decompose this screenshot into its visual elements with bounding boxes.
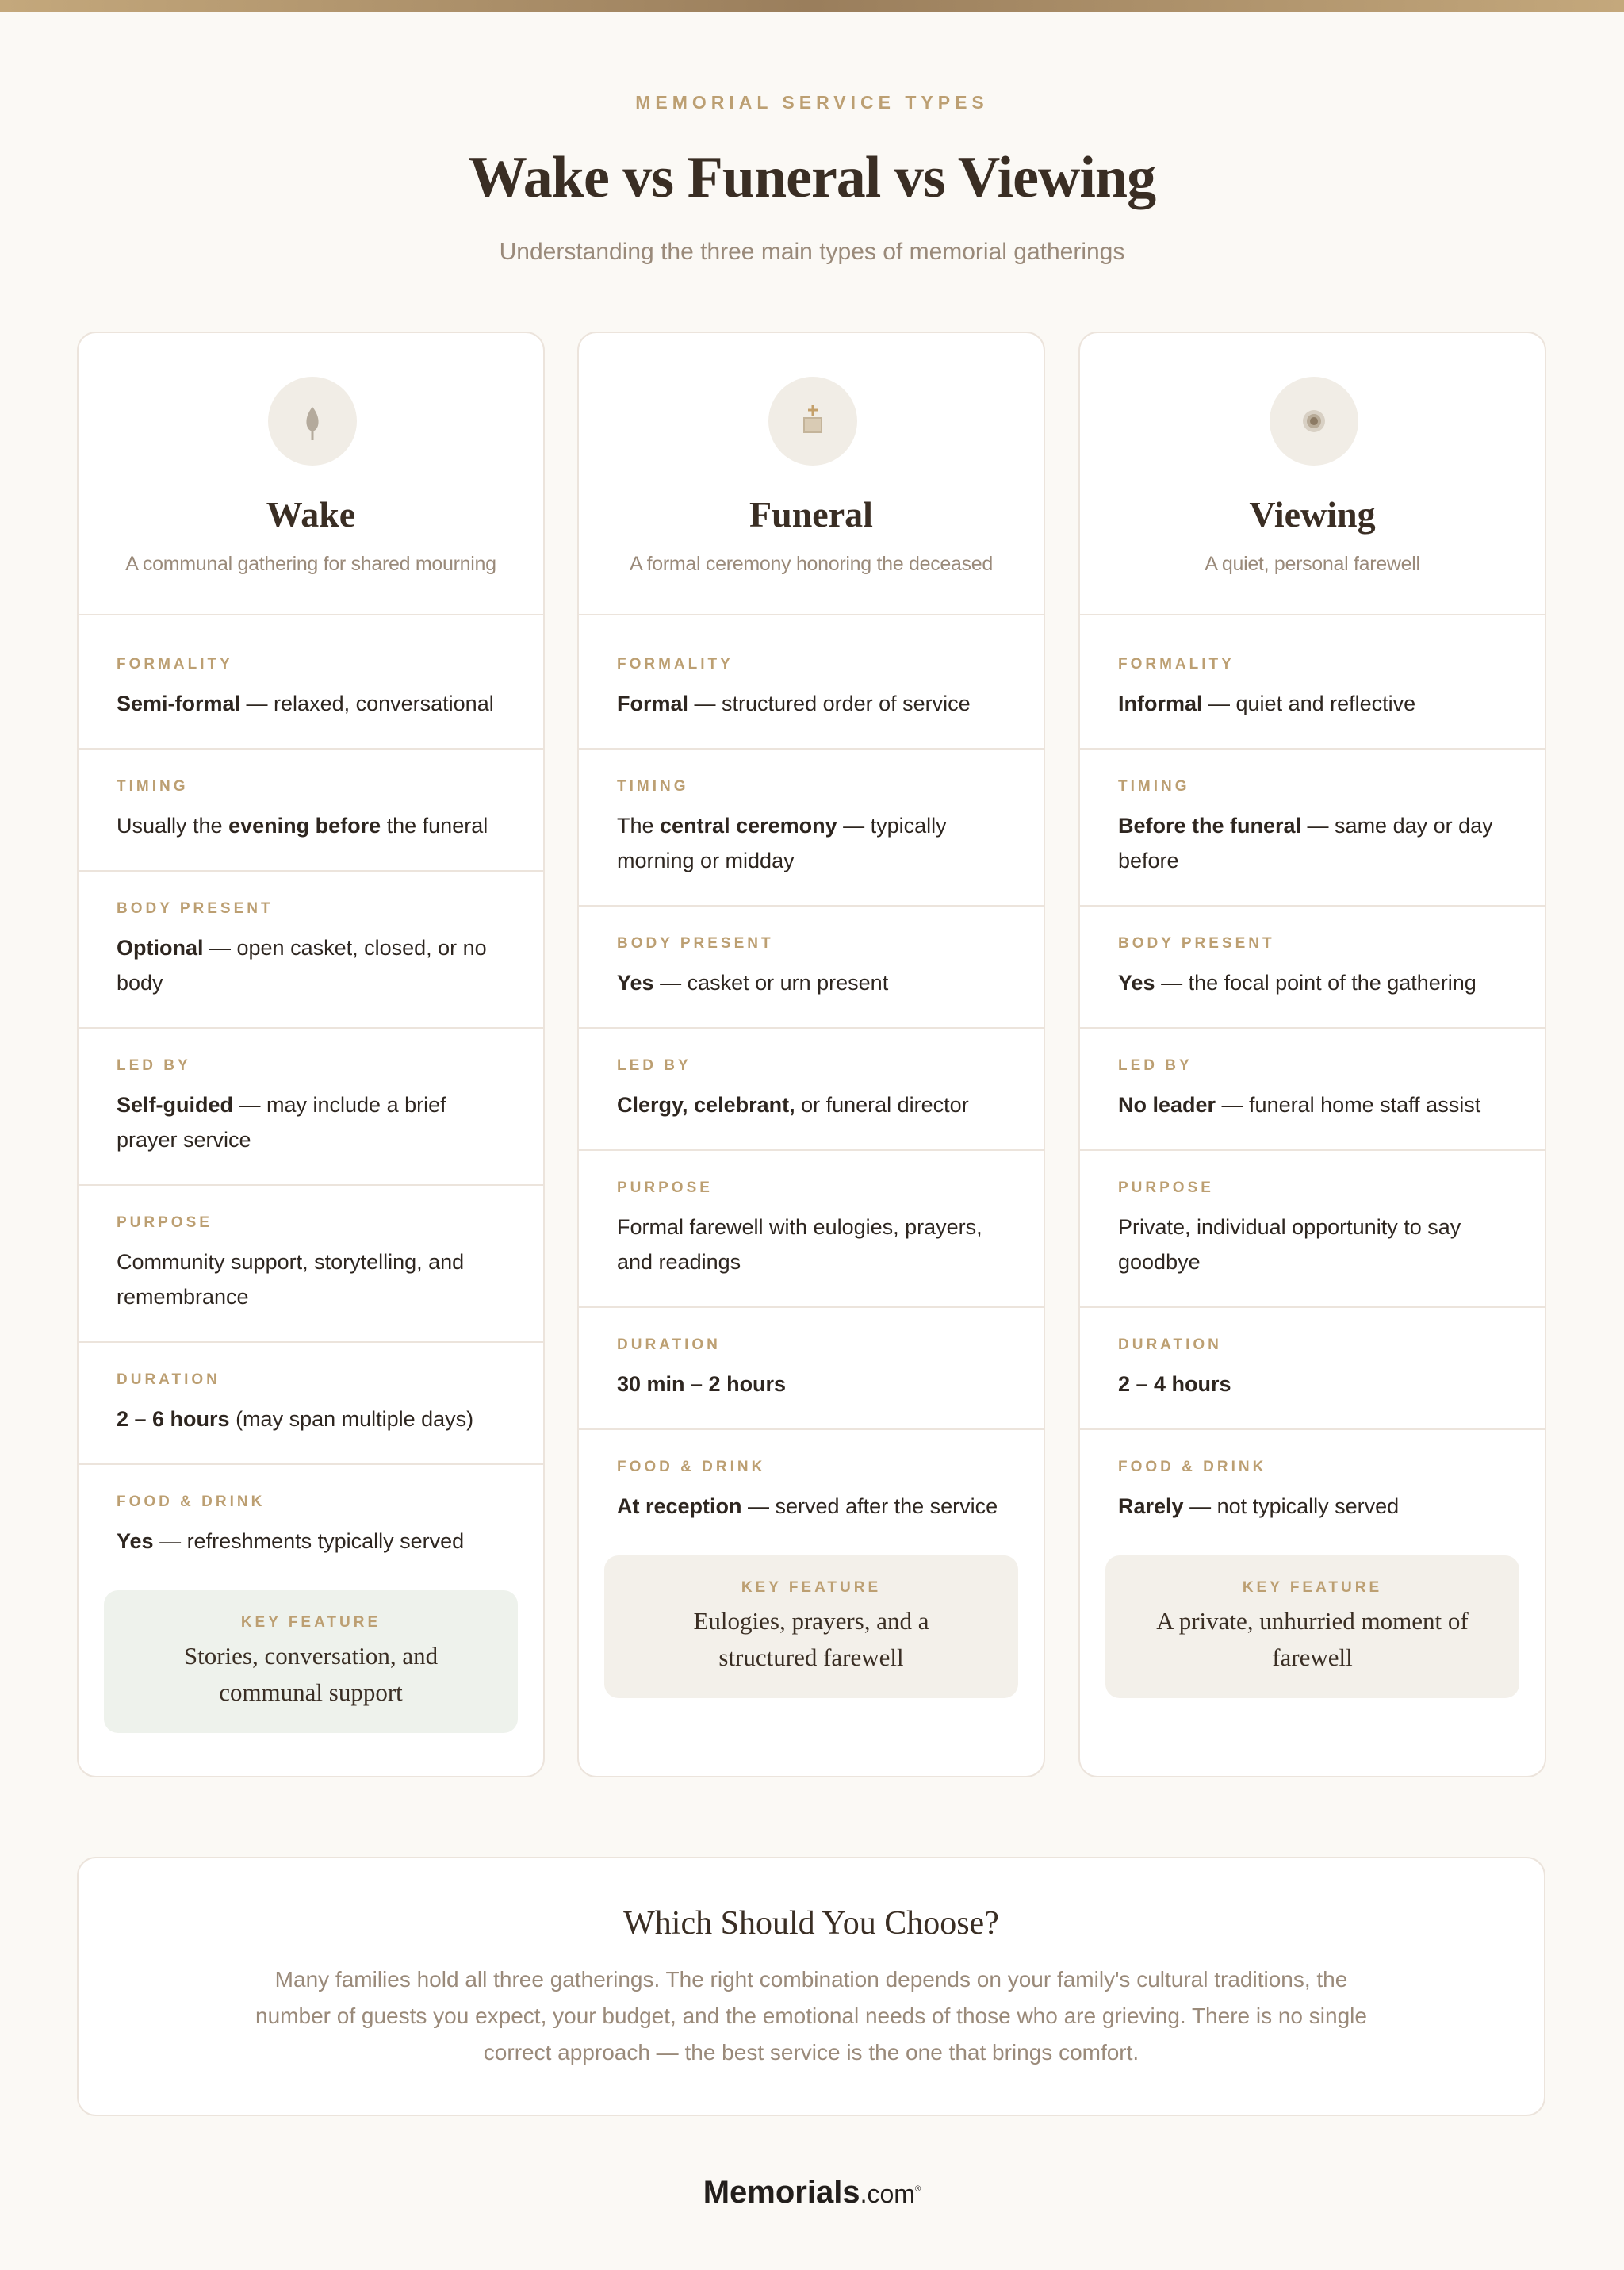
- panel: which should you choose: Which Should You Choose?: [623, 1905, 999, 1942]
- panel: viewing: TIMING: [1118, 778, 1189, 795]
- panel: funeral: and readings: [617, 1250, 741, 1274]
- key feature: viewing: KEY FEATURE: [1243, 1579, 1382, 1596]
- panel: wake: DURATION: [117, 1371, 220, 1388]
- key feature: funeral: [604, 1555, 1018, 1698]
- panel: viewing: 2 – 4 hours: [1118, 1372, 1231, 1396]
- subtitle: Understanding the three main types of memorial gatherings: [500, 239, 1124, 265]
- title: Wake vs Funeral vs Viewing: [469, 145, 1155, 210]
- panel: wake: BODY PRESENT: [117, 900, 274, 917]
- panel: funeral: FOOD & DRINK: [617, 1459, 765, 1475]
- card description: A communal gathering for shared mourning: [125, 553, 496, 575]
- panel: which should you choose: [77, 1857, 1545, 2116]
- panel: wake: prayer service: [117, 1128, 251, 1152]
- key feature: funeral: Eulogies, prayers, and a structured farewell: [693, 1607, 929, 1671]
- panel: viewing: FOOD & DRINK: [1118, 1459, 1266, 1475]
- icon: casket with cross: [768, 377, 857, 466]
- card header: wake: [79, 333, 543, 615]
- key feature: viewing: A private, unhurried moment of farewell: [1156, 1607, 1469, 1671]
- card title: Wake: [266, 494, 355, 535]
- icon: concentric circle: [1270, 377, 1358, 466]
- panel: wake: LED BY: [117, 1057, 191, 1074]
- card header: funeral: [579, 333, 1044, 615]
- panel: wake: FORMALITY: [117, 656, 233, 673]
- panel: wake: Self-guided — may include a brief: [117, 1093, 446, 1117]
- eyebrow: MEMORIAL SERVICE TYPES: [635, 92, 989, 113]
- panel: viewing: Rarely — not typically served: [1118, 1494, 1399, 1518]
- panel: funeral: The central ceremony — typically: [617, 814, 947, 838]
- card description: A quiet, personal farewell: [1205, 553, 1420, 575]
- panel: funeral: morning or midday: [617, 849, 795, 872]
- panel: funeral: At reception — served after the service: [617, 1494, 998, 1518]
- panel: funeral: FORMALITY: [617, 656, 733, 673]
- card description: A formal ceremony honoring the deceased: [630, 553, 993, 575]
- panel: which should you choose: Many families hold all three gatherings. The right combination depends on your family's cultural traditions, the: [275, 1967, 1347, 1992]
- panel: viewing: DURATION: [1118, 1336, 1222, 1353]
- panel: viewing: Private, individual opportunity to say: [1118, 1215, 1461, 1239]
- panel: wake: FOOD & DRINK: [117, 1494, 265, 1510]
- panel: wake: Semi-formal — relaxed, conversational: [117, 692, 494, 715]
- panel: viewing: PURPOSE: [1118, 1179, 1214, 1196]
- panel: wake: [77, 332, 545, 1777]
- panel: which should you choose: correct approach — the best service is the one that brings comfort.: [484, 2040, 1139, 2065]
- card header: viewing: [1080, 333, 1545, 615]
- icon: leaf: [268, 377, 357, 466]
- panel: viewing: before: [1118, 849, 1179, 872]
- panel: funeral: Formal — structured order of service: [617, 692, 971, 715]
- panel: wake: Community support, storytelling, and remembrance: [117, 1250, 464, 1309]
- logo: Memorials.com®: [703, 2175, 921, 2210]
- panel: funeral: BODY PRESENT: [617, 935, 774, 952]
- panel: viewing: goodbye: [1118, 1250, 1201, 1274]
- panel: funeral: Clergy, celebrant, or funeral director: [617, 1093, 969, 1117]
- panel: viewing: Informal — quiet and reflective: [1118, 692, 1415, 715]
- panel: viewing: Before the funeral — same day or day: [1118, 814, 1493, 838]
- panel: funeral: TIMING: [617, 778, 688, 795]
- panel: viewing: BODY PRESENT: [1118, 935, 1275, 952]
- panel: funeral: DURATION: [617, 1336, 721, 1353]
- panel: funeral: [577, 332, 1045, 1777]
- key feature: funeral: KEY FEATURE: [741, 1579, 881, 1596]
- panel: funeral: Yes — casket or urn present: [617, 971, 888, 995]
- panel: wake: 2 – 6 hours (may span multiple days): [117, 1407, 473, 1431]
- panel: viewing: [1078, 332, 1546, 1777]
- key feature: wake: [104, 1590, 518, 1733]
- panel: funeral: Formal farewell with eulogies, prayers,: [617, 1215, 982, 1239]
- panel: wake: Usually the evening before the funeral: [117, 814, 488, 838]
- panel: viewing: No leader — funeral home staff assist: [1118, 1093, 1480, 1117]
- panel: funeral: LED BY: [617, 1057, 691, 1074]
- card title: Viewing: [1249, 494, 1376, 535]
- key feature: wake: Stories, conversation, and communal support: [184, 1642, 438, 1706]
- panel: viewing: Yes — the focal point of the gathering: [1118, 971, 1477, 995]
- key feature: wake: KEY FEATURE: [241, 1614, 381, 1631]
- panel: which should you choose: number of guests you expect, your budget, and the emotional needs of those who are grieving. There is no single: [255, 2004, 1367, 2028]
- panel: wake: Optional — open casket, closed, or no body: [117, 936, 487, 995]
- card title: Funeral: [749, 494, 873, 535]
- key feature: viewing: [1105, 1555, 1519, 1698]
- panel: funeral: 30 min – 2 hours: [617, 1372, 786, 1396]
- panel: viewing: LED BY: [1118, 1057, 1193, 1074]
- panel: wake: PURPOSE: [117, 1214, 213, 1231]
- panel: funeral: PURPOSE: [617, 1179, 713, 1196]
- panel: wake: Yes — refreshments typically served: [117, 1529, 464, 1553]
- panel: viewing: FORMALITY: [1118, 656, 1235, 673]
- panel: wake: TIMING: [117, 778, 189, 795]
